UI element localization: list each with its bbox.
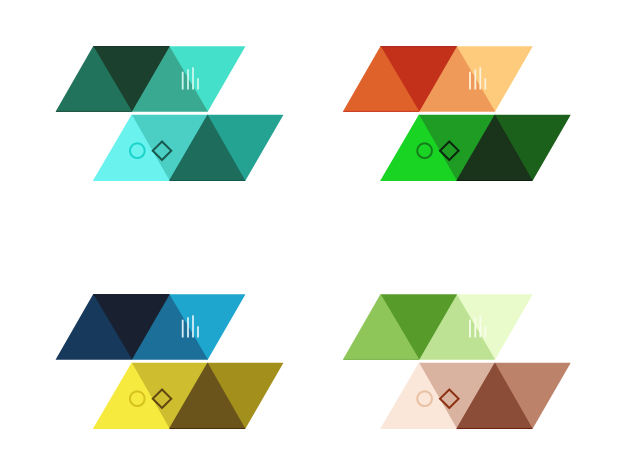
panel: teal set, top left [56, 46, 283, 181]
panel: light green and brown set, bottom right [343, 294, 570, 429]
bottom parallelogram: teal triangles [93, 115, 283, 181]
panel: blue and yellow set, bottom left [56, 294, 283, 429]
icon: diamond [153, 142, 171, 160]
bottom parallelogram: brown triangles [381, 363, 570, 429]
icon: diamond [440, 142, 459, 160]
bottom parallelogram: yellow triangles [93, 363, 283, 429]
panel: orange and green set, top right [343, 46, 570, 181]
top parallelogram: teal triangles [56, 46, 245, 112]
top parallelogram: orange triangles [343, 46, 532, 112]
icon: diamond [440, 390, 459, 408]
icon: circle [417, 143, 432, 158]
icon: circle [417, 391, 432, 406]
bottom parallelogram: green triangles [381, 115, 570, 181]
top parallelogram: blue triangles [56, 294, 245, 360]
icon: bar chart [183, 67, 198, 90]
icon: circle [130, 143, 145, 158]
icon: diamond [153, 390, 171, 408]
icon: bar chart [470, 315, 485, 338]
icon: circle [130, 391, 145, 406]
top parallelogram: light green triangles [343, 294, 532, 360]
icon: bar chart [470, 67, 485, 90]
icon: bar chart [183, 315, 198, 338]
